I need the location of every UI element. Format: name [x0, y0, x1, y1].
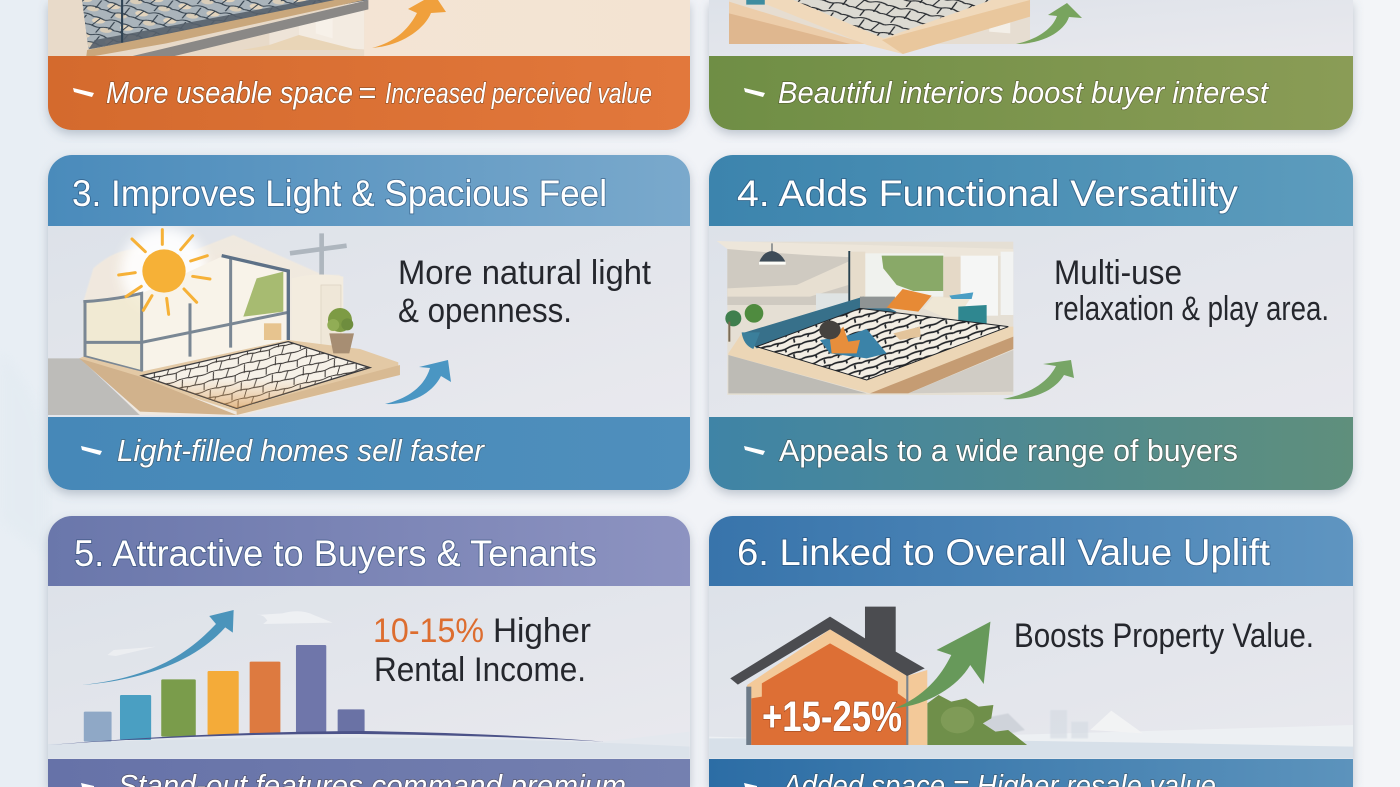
- card 1 dash icon: [73, 88, 94, 97]
- card 4 description: relaxation & play area.: [1054, 290, 1329, 328]
- card 6 title: 6. Linked to Overall Value Uplift: [737, 532, 1271, 573]
- card 4 illustration: relaxing on net: [717, 241, 1013, 395]
- card 6 dash icon: [744, 783, 757, 787]
- card 4 dash icon: [744, 446, 765, 455]
- card 4 body: [709, 226, 1353, 417]
- card 4 header band: [709, 155, 1353, 226]
- panel: card 1 usable space: [48, 0, 690, 130]
- card 5 description: 10-15%: [373, 612, 484, 650]
- card 6 body: [709, 586, 1353, 759]
- card 4 takeaway text: Appeals to a wide range of buyers: [779, 433, 1238, 468]
- card 1 takeaway bar: [48, 56, 690, 130]
- card 3 body: [48, 226, 690, 417]
- card 3 header band: [48, 155, 690, 226]
- card 4 title: 4. Adds Functional Versatility: [737, 173, 1239, 214]
- panel: card 4 functional versatility: [709, 155, 1353, 490]
- card 6 house value label: +15-25%: [762, 693, 902, 741]
- card 3 description: More natural light: [398, 254, 652, 292]
- card 4 arrow: [1003, 360, 1074, 399]
- panel: card 3 light and spacious: [48, 155, 690, 490]
- card 2 takeaway bar: [709, 56, 1353, 130]
- card 3 arrow: [385, 360, 451, 404]
- card 6 description: Boosts Property Value.: [1014, 617, 1314, 655]
- card 3 title: 3. Improves Light & Spacious Feel: [72, 173, 607, 214]
- card 6 header band: [709, 516, 1353, 586]
- card 3 description: & openness.: [398, 292, 572, 330]
- card 5 takeaway bar: [48, 759, 690, 787]
- card 5 description: Higher: [493, 612, 591, 650]
- card 1 takeaway text: Increased perceived value: [385, 78, 652, 110]
- card 2 arrow: [1016, 3, 1082, 44]
- card 1 illustration: loft net: [48, 0, 368, 56]
- panel: card 6 value uplift: [709, 516, 1354, 787]
- card 5 dash icon: [81, 783, 94, 787]
- card 4 description: Multi-use: [1054, 254, 1182, 292]
- panel: card 2 beautiful interiors: [709, 0, 1353, 130]
- card 6 house illustration: [709, 607, 1354, 758]
- card 6 takeaway bar: [709, 759, 1353, 787]
- card 5 bar chart: [48, 610, 690, 758]
- card 2 dash icon: [744, 88, 765, 97]
- panel: card 5 buyers and tenants: [48, 516, 690, 787]
- card 5 title: 5. Attractive to Buyers & Tenants: [74, 533, 597, 574]
- card 1 body: [364, 0, 690, 56]
- card 5 header band: [48, 516, 690, 586]
- card 4 takeaway bar: [709, 417, 1353, 490]
- card 2 illustration: platform net: [729, 0, 1030, 54]
- card 5 rising arrow: [82, 610, 234, 685]
- card 1 arrow: [372, 0, 446, 48]
- card 2 body: [709, 0, 1353, 57]
- card 5 body: [48, 586, 690, 759]
- card 3 dash icon: [81, 446, 102, 455]
- card 2 takeaway text: Beautiful interiors boost buyer interest: [778, 75, 1269, 110]
- card 6 rising arrow: [894, 622, 990, 708]
- card 3 takeaway text: Light-filled homes sell faster: [117, 433, 486, 468]
- card 1 takeaway text: =: [358, 75, 376, 110]
- card 5 description: Rental Income.: [374, 651, 586, 689]
- card 3 takeaway bar: [48, 417, 690, 490]
- card 1 takeaway text: More useable space: [106, 75, 353, 110]
- card 3 illustration: sunlit glass room: [48, 228, 400, 415]
